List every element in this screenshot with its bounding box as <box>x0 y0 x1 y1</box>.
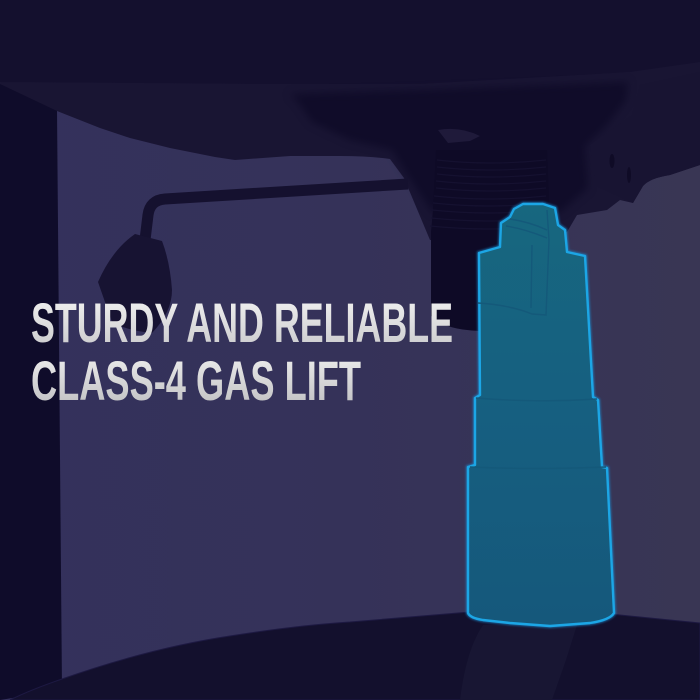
mechanism highlight <box>438 129 480 143</box>
chair base <box>10 612 700 700</box>
threaded gas lift cylinder <box>430 150 549 331</box>
dark seat plate <box>290 82 628 212</box>
seat upper shadow band <box>0 0 700 84</box>
title line 1: STURDY AND RELIABLE <box>31 291 453 354</box>
base pole <box>460 625 577 700</box>
lift body <box>468 204 614 626</box>
lever knob <box>98 234 172 333</box>
lift inner contours <box>470 210 606 468</box>
bracket holes <box>610 154 631 183</box>
title line 2: CLASS-4 GAS LIFT <box>31 349 361 412</box>
thread lines <box>430 160 546 229</box>
lift outer glow <box>468 204 614 626</box>
chair seat underside <box>0 0 700 240</box>
title <box>31 291 453 412</box>
lever arm <box>145 184 408 240</box>
gas lift highlight <box>468 204 614 626</box>
left dark pillar <box>0 80 62 700</box>
seat bracket <box>590 72 700 203</box>
